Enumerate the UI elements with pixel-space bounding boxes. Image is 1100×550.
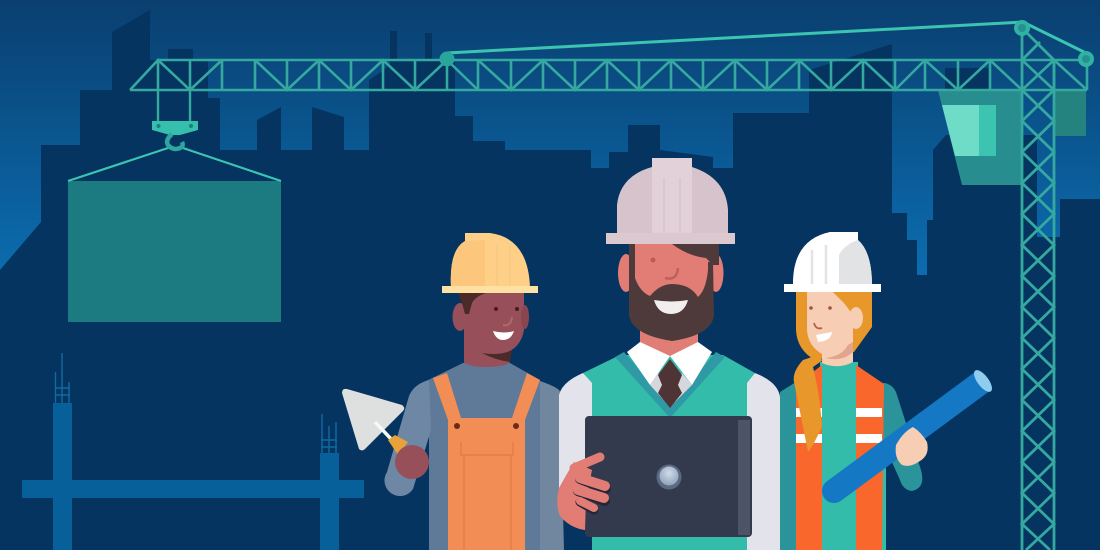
worker: surveyor with plans [780, 232, 995, 550]
surveyor braid [794, 356, 823, 452]
crane pulleys [440, 20, 1094, 67]
engineer vest [583, 355, 755, 550]
surveyor hair back [796, 292, 872, 360]
counterweight [1054, 90, 1086, 136]
engineer neck and collar [627, 330, 712, 408]
surveyor hard hat [784, 232, 881, 292]
worker: engineer with tablet [557, 158, 780, 550]
crane cab [938, 90, 1022, 185]
trowel [342, 389, 408, 455]
tablet [585, 416, 752, 537]
mason overalls [433, 373, 540, 550]
crane tension cables [447, 22, 1084, 53]
mason right arm [540, 381, 564, 550]
rolled blueprint [822, 367, 995, 503]
suspended container [68, 181, 281, 322]
unfinished concrete structure [22, 353, 364, 550]
engineer sleeves [559, 373, 594, 532]
surveyor safety vest [796, 365, 884, 550]
mason hand [395, 445, 429, 479]
mason head [452, 293, 529, 367]
mason torso [420, 363, 540, 550]
engineer hard hat [606, 158, 735, 244]
worker: mason with trowel [342, 233, 564, 550]
hook block and hook [152, 90, 198, 149]
surveyor hand [896, 427, 928, 466]
engineer hand [557, 457, 606, 530]
crane truss jib [130, 58, 1087, 90]
surveyor left arm [780, 382, 796, 550]
surveyor shirt [820, 362, 858, 550]
crane tower [1022, 28, 1054, 550]
engineer head [618, 244, 724, 341]
surveyor right arm [880, 383, 922, 491]
mason left arm [384, 380, 431, 496]
lifting slings [68, 147, 281, 181]
surveyor head [807, 292, 863, 366]
mason hard hat [442, 233, 538, 293]
